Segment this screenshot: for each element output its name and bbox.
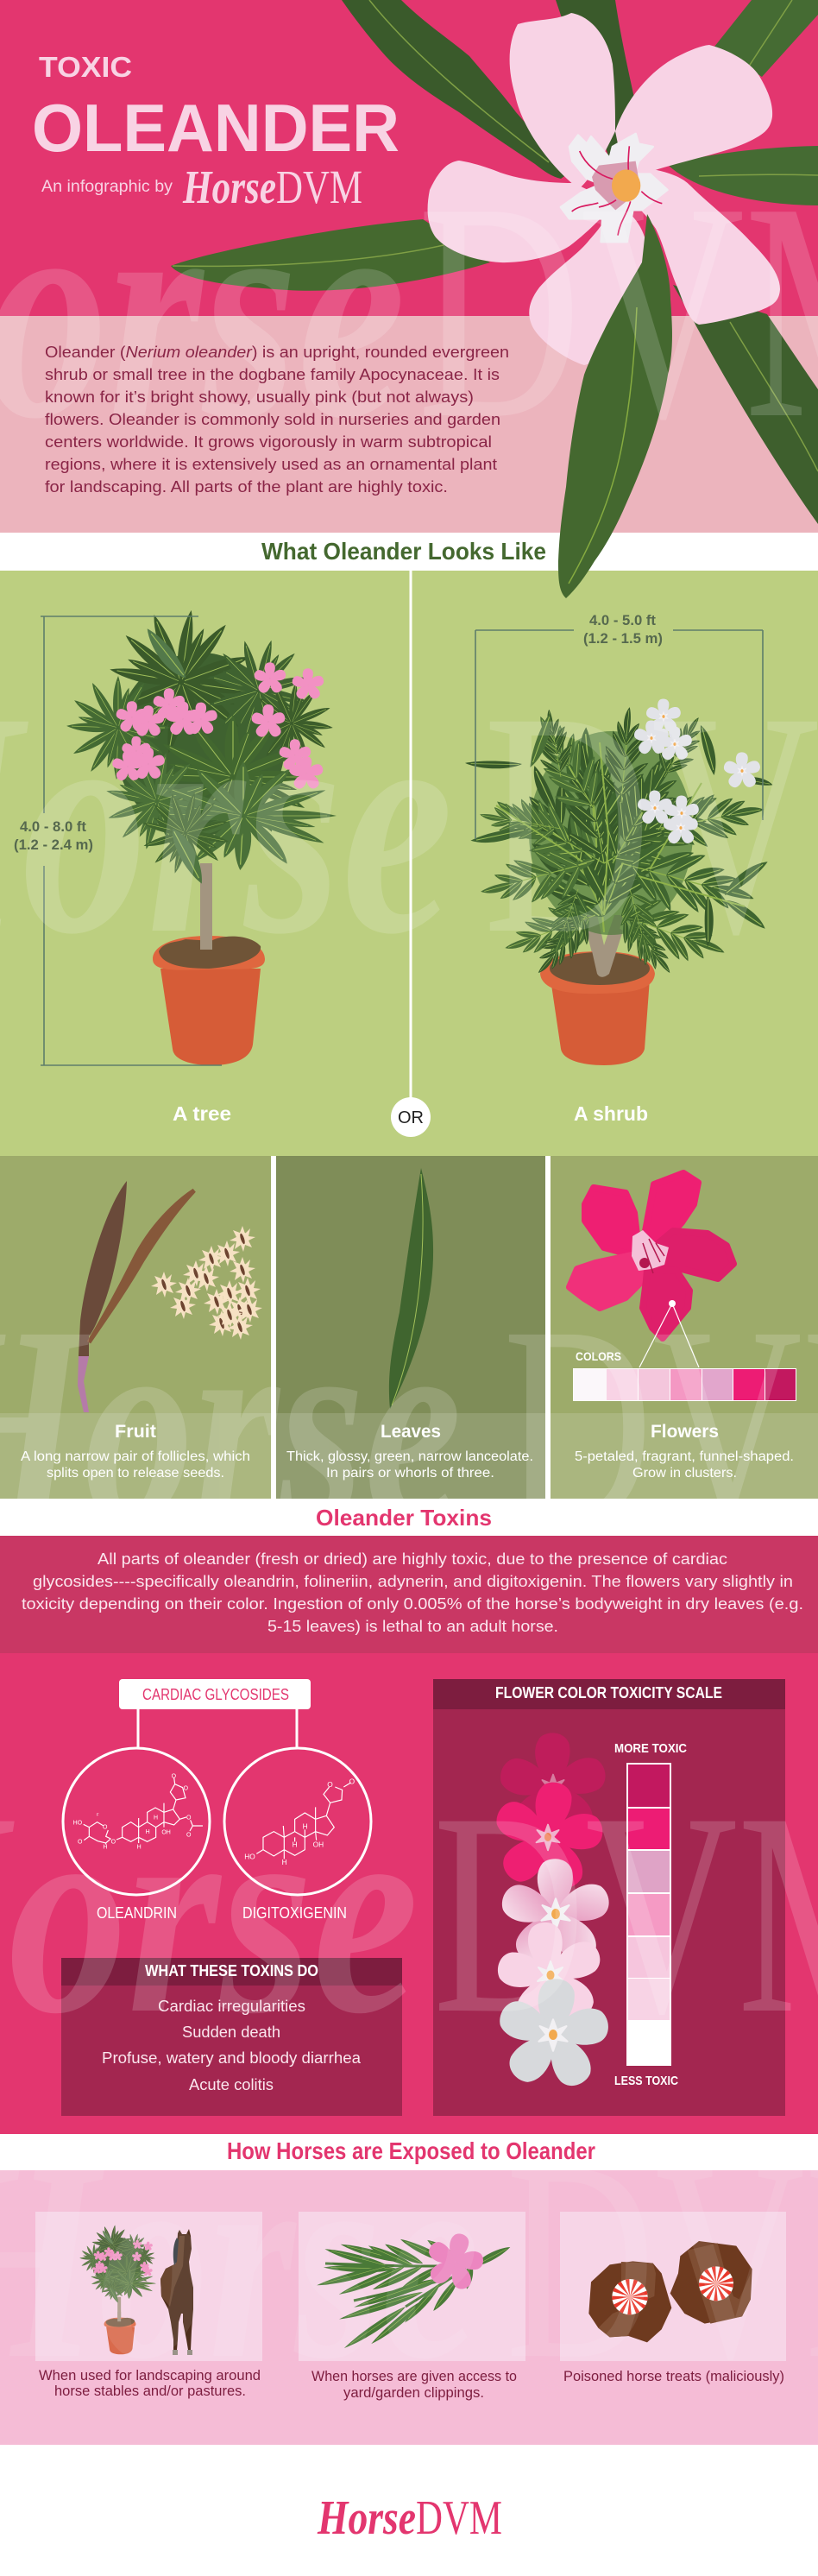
intro text: for landscaping. All parts of the plant are highly toxic.: [45, 477, 448, 496]
illustration: large oleander flower with leaves: [171, 0, 818, 598]
label: a shrub: A shrub: [574, 1102, 648, 1125]
chemical structure: oleandrin: O: [186, 1815, 192, 1822]
chemical structure: oleandrin: H: [137, 1844, 142, 1850]
caption: leaves: [286, 1422, 533, 1481]
byline with logo: An infographic by: [41, 178, 173, 196]
panel: toxins backgrounds: [0, 1536, 818, 2134]
cardiac glycosides label: CARDIAC GLYCOSIDES: [142, 1686, 289, 1703]
intro text: [45, 343, 509, 496]
chemical structure: oleandrin: O: [186, 1832, 192, 1838]
chemical structure: oleandrin: H: [146, 1829, 150, 1835]
caption: leaves: Leaves: [381, 1422, 441, 1442]
chemical structure: digitoxigenin: O: [349, 1777, 356, 1786]
shrub width label: 4.0 - 5.0 ft: [589, 612, 656, 628]
panel: plant parts background: [0, 1156, 818, 1499]
heading: how horses are exposed: How Horses are Exposed to Oleander: [227, 2137, 595, 2164]
toxicity scale labels: FLOWER COLOR TOXICITY SCALE: [495, 1684, 722, 1702]
chemical structure: digitoxigenin: H: [293, 1840, 298, 1848]
heading: oleander toxins: Oleander Toxins: [316, 1505, 492, 1531]
toxin description: 5-15 leaves) is lethal to an adult horse.: [267, 1617, 558, 1635]
intro text: flowers. Oleander is commonly sold in nurseries and garden: [45, 410, 500, 428]
shrub trunk: [582, 915, 623, 977]
watermark: toxins: [0, 1753, 818, 2074]
flower center: [561, 134, 667, 242]
title: TOXIC: [39, 51, 132, 83]
caption: leaves: In pairs or whorls of three.: [326, 1466, 494, 1481]
caption: flowers: Flowers: [651, 1422, 719, 1442]
chemical structure: digitoxigenin: O: [327, 1780, 333, 1789]
chemical structure: oleandrin: H: [103, 1845, 107, 1851]
byline with logo: [41, 161, 362, 213]
caption: fruit: Fruit: [115, 1422, 156, 1442]
chemical structure: oleandrin: [73, 1773, 203, 1851]
divider with OR: [391, 571, 431, 1137]
caption: treats: Poisoned horse treats (maliciously): [563, 2369, 784, 2384]
panel: tree or shrub background: [0, 571, 818, 1156]
illustration: magenta flower: [569, 1173, 733, 1338]
icon: horse: [160, 2229, 193, 2355]
toxicity scale labels: LESS TOXIC: [614, 2074, 678, 2088]
toxin description: glycosides----specifically oleandrin, folineriin, adynerin, and digitoxigenin. The flowers vary slightly in: [33, 1572, 793, 1590]
chemical structure: digitoxigenin: OH: [313, 1840, 324, 1848]
chemical structure: oleandrin: O: [172, 1773, 177, 1779]
toxin description: All parts of oleander (fresh or dried) are highly toxic, due to the presence of cardiac: [98, 1550, 727, 1568]
chemical structure: oleandrin: O: [103, 1825, 108, 1831]
cardiac glycosides connector: [63, 1709, 371, 1895]
caption: fruit: A long narrow pair of follicles, which: [21, 1449, 250, 1464]
footer logo: DVM: [416, 2491, 502, 2545]
chemical structure: oleandrin: O: [78, 1840, 83, 1846]
tree height label: (1.2 - 2.4 m): [14, 837, 93, 853]
footer logo: [317, 2491, 502, 2545]
caption band: [0, 1413, 818, 1499]
shrub width label: [583, 612, 663, 647]
byline with logo: Horse: [182, 161, 276, 213]
caption: landscaping: When used for landscaping around: [39, 2368, 261, 2383]
shrub width label: (1.2 - 1.5 m): [583, 630, 663, 647]
label: or: OR: [398, 1108, 424, 1127]
caption: clippings: When horses are given access to: [311, 2369, 517, 2384]
chemical structure: digitoxigenin: HO: [244, 1852, 255, 1860]
chemical structure: digitoxigenin: H: [303, 1822, 308, 1830]
toxicity scale labels: MORE TOXIC: [614, 1741, 687, 1756]
toxin effects list: Acute colitis: [189, 2076, 274, 2093]
intro text: regions, where it is extensively used as an ornamental plant: [45, 455, 497, 473]
chemical structure: oleandrin: H: [154, 1815, 158, 1821]
footer logo: Horse: [317, 2491, 416, 2545]
label: colors: COLORS: [576, 1349, 621, 1363]
caption: fruit: [21, 1422, 250, 1481]
molecule name: digitoxigenin: DIGITOXIGENIN: [242, 1904, 347, 1922]
illustration: poisoned treats: [588, 2241, 752, 2342]
illustration: potted tree beside horse: [79, 2222, 193, 2355]
caption: clippings: [311, 2369, 517, 2401]
toxicity scale bar: [626, 1763, 671, 2066]
shrub pot: [551, 979, 650, 1065]
intro text: Oleander ( Nerium oleander ) is an upright, rounded evergreen: [45, 343, 509, 361]
height bracket: tree: [41, 616, 222, 1065]
caption: landscaping: [39, 2368, 261, 2399]
toxin effects list: [102, 1962, 362, 2093]
caption: flowers: [575, 1422, 794, 1481]
toxin effects list: Profuse, watery and bloody diarrhea: [102, 2049, 362, 2067]
chemical structure: digitoxigenin: [244, 1777, 356, 1866]
intro text: known for it’s bright showy, usually pink (but not always): [45, 388, 474, 406]
chemical structure: digitoxigenin: H: [282, 1858, 287, 1866]
chemical structure: oleandrin: O: [184, 1785, 189, 1791]
illustration: garden clippings: [316, 2226, 512, 2352]
caption: leaves: Thick, glossy, green, narrow lanceolate.: [286, 1449, 533, 1464]
caption: fruit: splits open to release seeds.: [47, 1466, 224, 1481]
toxicity flowers: [481, 1733, 617, 2097]
chemical structure: oleandrin: O: [111, 1840, 116, 1846]
toxin effects list: Sudden death: [182, 2024, 280, 2041]
toxin description: toxicity depending on their color. Ingestion of only 0.005% of the horse’s bodyweight in dry leaves (e.g.: [22, 1594, 803, 1613]
intro text: centers worldwide. It grows vigorously in warm subtropical: [45, 432, 492, 451]
chemical structure: oleandrin: HO: [73, 1820, 83, 1826]
toxin effects list: WHAT THESE TOXINS DO: [145, 1962, 318, 1979]
chemical structure: oleandrin: F: [97, 1812, 99, 1817]
label: a tree: A tree: [173, 1102, 231, 1125]
panel: exposure background: [0, 2170, 818, 2445]
shrub foliage: [465, 702, 773, 987]
byline with logo: DVM: [276, 161, 362, 213]
toxin description: [22, 1550, 803, 1635]
cardiac glycosides label: [119, 1679, 311, 1709]
intro text: shrub or small tree in the dogbane family Apocynaceae. It is: [45, 365, 500, 383]
heading: what oleander looks like: What Oleander Looks Like: [261, 538, 546, 565]
shrub white flowers: [632, 698, 762, 846]
tree height label: 4.0 - 8.0 ft: [20, 818, 86, 835]
molecule name: oleandrin: OLEANDRIN: [97, 1904, 177, 1922]
caption: landscaping: horse stables and/or pastures.: [54, 2383, 246, 2399]
title: [32, 51, 400, 166]
illustration: fruit follicles and seeds: [78, 1181, 262, 1412]
caption: flowers: 5-petaled, fragrant, funnel-shaped.: [575, 1449, 794, 1464]
panel: hero background: [0, 0, 818, 533]
tree height label: [14, 818, 93, 853]
caption: flowers: Grow in clusters.: [632, 1466, 737, 1481]
illustration: single leaf: [389, 1168, 433, 1409]
chemical structure: oleandrin: OH: [161, 1830, 171, 1836]
width bracket: shrub: [475, 630, 763, 839]
illustration: shrub: [465, 698, 773, 1065]
color swatches with pointer: [573, 1300, 796, 1401]
illustration: tree: [66, 600, 337, 1065]
title: OLEANDER: [32, 90, 400, 166]
toxicity scale labels: [495, 1684, 722, 2088]
caption: clippings: yard/garden clippings.: [343, 2385, 484, 2401]
toxin effects list: Cardiac irregularities: [158, 1998, 305, 2015]
